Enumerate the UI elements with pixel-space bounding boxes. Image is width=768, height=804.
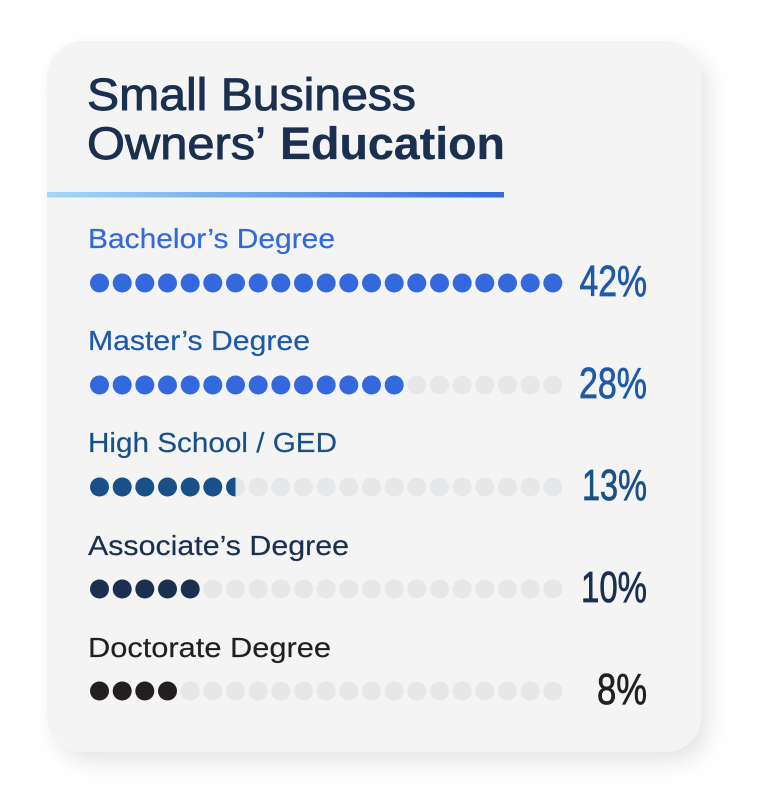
label: Bachelor's Degree: Bachelor’s Degree (88, 223, 335, 254)
row: High School / GED 13% (90, 432, 646, 501)
dots: Bachelor's Degree (90, 274, 562, 292)
row: Doctorate Degree 8% (88, 632, 647, 714)
panel: education card (47, 41, 701, 752)
dots: Doctorate Degree (90, 682, 562, 700)
dots: Master's Degree (90, 376, 562, 394)
label: Doctorate Degree: Doctorate Degree (88, 632, 331, 663)
row: Associate's Degree 10% (88, 530, 647, 612)
value: 28%: 28% (579, 359, 647, 408)
title (87, 69, 505, 169)
dots: Associate's Degree (90, 580, 562, 598)
title: Education (280, 118, 505, 169)
row: Bachelor's Degree 42% (88, 223, 647, 306)
value: 13%: 13% (582, 461, 647, 510)
value: 8%: 8% (597, 665, 647, 714)
value: 10%: 10% (581, 563, 647, 612)
title: Owners’ (87, 118, 266, 169)
title underline gradient (47, 192, 504, 198)
title: Small Business (87, 69, 416, 120)
row: Master's Degree 28% (88, 325, 647, 408)
label: Associate's Degree: Associate’s Degree (88, 530, 349, 561)
label: High School / GED: High School / GED (88, 427, 337, 458)
label: Master's Degree: Master’s Degree (88, 325, 310, 356)
value: 42%: 42% (580, 257, 647, 306)
dots: High School / GED (90, 478, 562, 496)
